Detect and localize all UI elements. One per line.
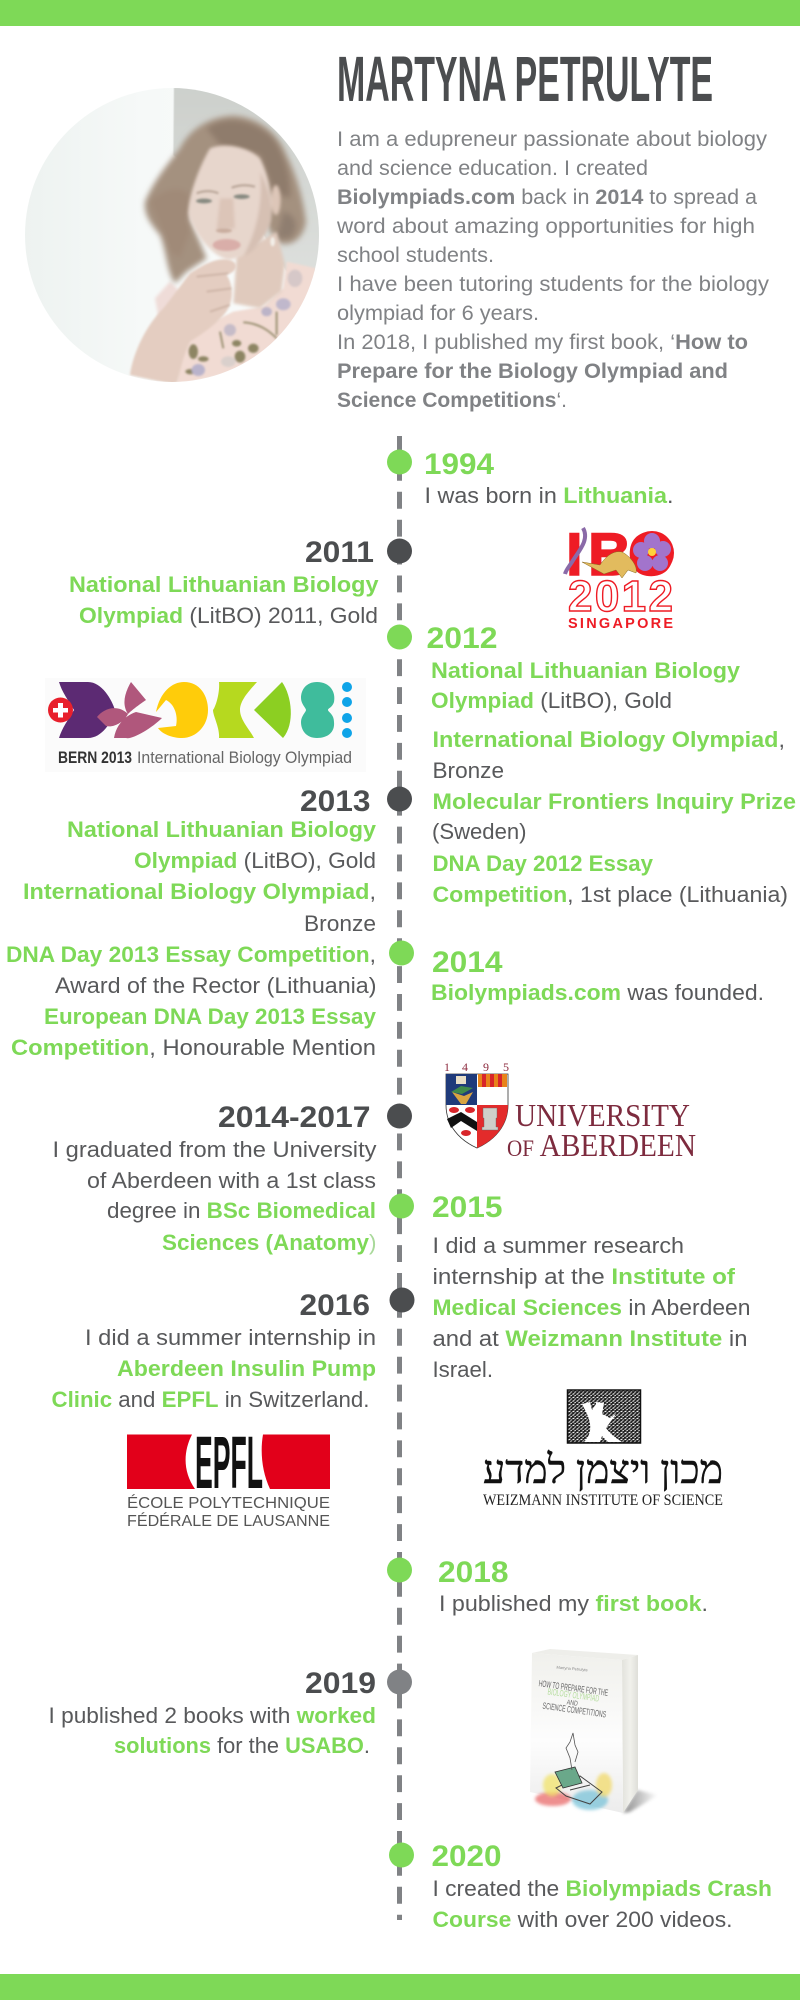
bottom green bar: [0, 1974, 800, 2000]
entry: 2013: [6, 785, 377, 1060]
entry: 2012: Bronze: [432, 758, 504, 783]
entry: 2019: 2019: [305, 1667, 376, 1700]
entry: 2013: 2013: [300, 785, 370, 818]
entry: 2013: European DNA Day 2013 Essay: [44, 1004, 376, 1029]
entry: 2012: Olympiad (LitBO), Gold: [431, 688, 672, 713]
entry: 2015: Israel.: [432, 1357, 493, 1382]
entry: 2019: [48, 1667, 376, 1758]
entry: 2014: Biolympiads.com was founded.: [431, 980, 764, 1005]
biography text: In 2018, I published my first book, ‘ How to: [337, 330, 748, 354]
entry: 2012: DNA Day 2012 Essay: [432, 851, 653, 876]
entry: 2012: (Sweden): [432, 819, 526, 844]
entry: 2019: solutions for the USABO.: [114, 1733, 370, 1758]
logo: Weizmann Institute of Science: WEIZMANN INSTITUTE OF SCIENCE: [483, 1492, 723, 1509]
entry: 2020: Course with over 200 videos.: [432, 1907, 732, 1932]
entry: 2014: 2014: [432, 946, 503, 979]
entry: 2012: International Biology Olympiad ,: [432, 727, 785, 752]
entry: 2011: Olympiad (LitBO) 2011, Gold: [79, 603, 378, 628]
logo: IBO 2012 Singapore: 2012: [568, 572, 673, 621]
entry: 2016: Clinic and EPFL in Switzerland.: [52, 1387, 370, 1412]
logo: EPFL: ÉCOLE POLYTECHNIQUE: [127, 1495, 330, 1512]
entry: 2015: [432, 1191, 750, 1382]
biography text: I have been tutoring students for the biology: [337, 272, 769, 296]
biography text: Prepare for the Biology Olympiad and: [337, 359, 728, 383]
entry: 2014-2017: [52, 1101, 377, 1255]
entry: 2018: [438, 1556, 708, 1616]
book cover image: AND: [566, 1699, 578, 1708]
entry: 2011: [69, 536, 379, 628]
entry: 2018: 2018: [438, 1556, 508, 1589]
logo: IBO 2012 Singapore: O: [628, 521, 675, 588]
entry: 2020: 2020: [432, 1840, 502, 1873]
biography text: Science Competitions‘.: [337, 388, 567, 412]
entry: 2015: internship at the Institute of: [432, 1264, 736, 1289]
logo: EPFL: FÉDÉRALE DE LAUSANNE: [127, 1513, 330, 1530]
entry: 2013: Olympiad (LitBO), Gold: [134, 848, 376, 873]
entry: 2011: 2011: [305, 536, 374, 569]
logo: University of Aberdeen: OF ABERDEEN: [507, 1127, 696, 1163]
entry: 2016: I did a summer internship in: [85, 1325, 376, 1350]
logo: University of Aberdeen: 1: [444, 1060, 450, 1074]
entry: 2014-2017: of Aberdeen with a 1st class: [87, 1168, 376, 1193]
entry: 2012: Competition, 1st place (Lithuania): [432, 882, 788, 907]
logo: Bern 2013 International Biology Olympiad: BERN 2013: [58, 748, 132, 767]
biography text: I am a edupreneur passionate about biology: [337, 127, 767, 151]
logo: Bern 2013 International Biology Olympiad: [45, 678, 366, 772]
book cover image: Martyna Petrulyte: [556, 1665, 589, 1672]
logo: IBO 2012 Singapore: I: [566, 521, 583, 588]
entry: 2013: Competition , Honourable Mention: [11, 1035, 376, 1060]
entry: 2013: Bronze: [304, 911, 376, 936]
entry: 2011: National Lithuanian Biology: [69, 572, 379, 597]
entry: 2020: I created the Biolympiads Crash: [432, 1876, 772, 1901]
book cover image: BIOLOGY OLYMPIAD: [547, 1686, 600, 1704]
entry: 2015: and at Weizmann Institute in: [432, 1326, 748, 1351]
logo: IBO 2012 Singapore: SINGAPORE: [568, 616, 673, 632]
entry: 2015: I did a summer research: [432, 1233, 684, 1258]
entry: 2012: Molecular Frontiers Inquiry Prize: [432, 789, 796, 814]
logo: EPFL: [127, 1421, 330, 1530]
biography text: olympiad for 6 years.: [337, 301, 539, 325]
entry: 2014-2017: Sciences (Anatomy): [162, 1230, 376, 1255]
logo: University of Aberdeen: 5: [503, 1060, 509, 1074]
logo: University of Aberdeen: 9: [483, 1060, 489, 1074]
book cover image: HOW TO PREPARE FOR THE: [538, 1678, 609, 1698]
logo: EPFL: EPFL: [195, 1421, 263, 1504]
entry: 2014-2017: I graduated from the University: [52, 1137, 377, 1162]
top green bar: [0, 0, 800, 26]
portrait photo: [25, 88, 319, 382]
entry: 2016: Aberdeen Insulin Pump: [117, 1356, 376, 1381]
timeline dashed line: [397, 436, 402, 1920]
entry: 2014-2017: degree in BSc Biomedical: [107, 1198, 376, 1223]
entry: 2019: I published 2 books with worked: [48, 1703, 376, 1728]
logo: IBO 2012 Singapore: B: [588, 521, 631, 588]
biography text: Biolympiads.com back in 2014 to spread a: [337, 185, 757, 209]
entry: 2016: 2016: [300, 1289, 370, 1322]
entry: 2013: International Biology Olympiad ,: [23, 879, 376, 904]
entry: 1994: 1994: [424, 448, 494, 481]
book cover image: SCIENCE COMPETITIONS: [542, 1701, 607, 1719]
entry: 2013: National Lithuanian Biology: [67, 817, 377, 842]
entry: 2014-2017: 2014-2017: [218, 1101, 370, 1134]
logo: Weizmann Institute of Science: [483, 1390, 723, 1509]
entry: 2015: 2015: [432, 1191, 502, 1224]
entry: 2012: 2012: [426, 622, 498, 655]
logo: University of Aberdeen: 4: [462, 1060, 468, 1074]
biography text: [336, 127, 769, 412]
entry: 2016: [52, 1289, 376, 1412]
entry: 1994: [424, 448, 674, 508]
logo: IBO 2012 Singapore: [565, 521, 675, 632]
biography text: word about amazing opportunities for high: [336, 214, 755, 238]
logo: University of Aberdeen: UNIVERSITY: [515, 1097, 690, 1133]
entry: 2020: [432, 1840, 772, 1932]
book cover image: [530, 1649, 658, 1813]
logo: University of Aberdeen: [444, 1060, 696, 1163]
logo: Bern 2013 International Biology Olympiad: International Biology Olympiad: [137, 748, 352, 767]
entry: 2013: DNA Day 2013 Essay Competition,: [6, 942, 376, 967]
biography text: and science education. I created: [337, 156, 648, 180]
entry: 2018: I published my first book.: [439, 1591, 708, 1616]
entry: 2012: National Lithuanian Biology: [431, 658, 741, 683]
entry: 2013: Award of the Rector (Lithuania): [55, 973, 376, 998]
logo: Weizmann Institute of Science: מכון ויצמן למדע: [483, 1447, 723, 1492]
biography text: school students.: [337, 243, 494, 267]
entry: 1994: I was born in Lithuania.: [424, 483, 674, 508]
entry: 2015: Medical Sciences in Aberdeen: [432, 1295, 750, 1320]
timeline nodes: [387, 450, 414, 1868]
entry: 2014: [431, 946, 764, 1005]
entry: 2012: [426, 622, 796, 907]
